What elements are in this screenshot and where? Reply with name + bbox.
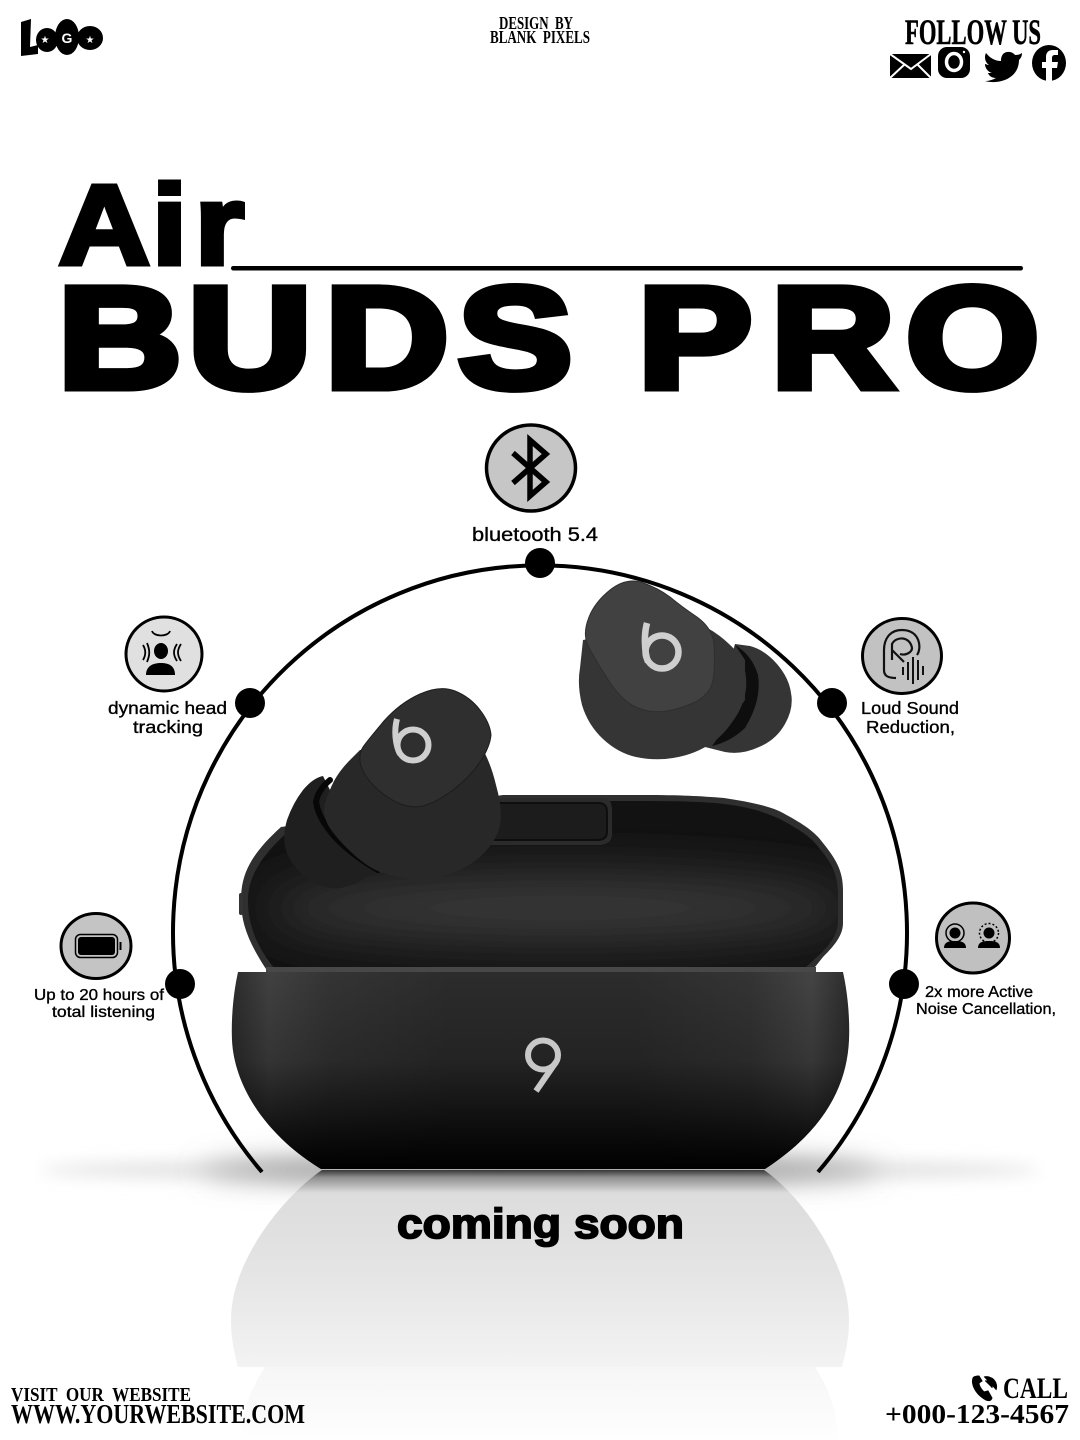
feature: loud sound reduction xyxy=(817,618,959,737)
icon: instagram xyxy=(938,47,970,78)
logo: G xyxy=(62,30,73,46)
connector dot xyxy=(889,969,919,999)
icon: logo mark on case xyxy=(528,1040,558,1091)
earbud body xyxy=(324,745,501,879)
logo: ★ xyxy=(86,35,95,46)
connector dot xyxy=(525,548,555,578)
sound reduction label: Loud Sound xyxy=(861,698,959,718)
feature: battery: total listening xyxy=(52,1004,155,1021)
design credit: BLANK PIXELS xyxy=(490,27,590,47)
icon: twitter xyxy=(985,52,1022,82)
icon: facebook xyxy=(1032,45,1066,81)
ear tip gap xyxy=(316,780,378,870)
earbud cap xyxy=(585,581,714,712)
bluetooth label: bluetooth 5.4 xyxy=(472,525,598,546)
feature: battery xyxy=(34,914,195,1021)
icon: b logo left xyxy=(395,719,428,760)
battery label: Up to 20 hours of xyxy=(34,987,165,1004)
feature: bluetooth xyxy=(472,425,598,578)
title: Air with underline: Air xyxy=(59,162,244,288)
icon: battery xyxy=(61,914,131,978)
icon: head tracking xyxy=(126,617,202,691)
icon: mail xyxy=(890,54,931,78)
feature: active noise cancellation: Noise Cancellation, xyxy=(916,1001,1056,1018)
logo: ★ xyxy=(41,35,50,46)
design credit: DESIGN BY xyxy=(499,13,573,33)
coming soon text: coming soon xyxy=(397,1200,684,1247)
title: Air with underline xyxy=(59,162,1023,288)
connector dot xyxy=(165,969,195,999)
charging case lid xyxy=(239,795,860,972)
icon: ear xyxy=(862,618,942,694)
ear tip xyxy=(705,644,792,753)
right earbud xyxy=(579,581,792,759)
earbud cap xyxy=(360,689,491,807)
website block xyxy=(11,1384,305,1429)
follow us social block xyxy=(890,12,1066,82)
left earbud xyxy=(284,689,501,888)
ear tip xyxy=(284,776,377,888)
case reflection xyxy=(231,1170,849,1376)
icon: b logo right xyxy=(645,623,678,668)
shadow band under case xyxy=(40,1158,1040,1182)
title: BUDS PRO: BUDS PRO xyxy=(58,257,1039,418)
noise cancellation label: 2x more Active xyxy=(925,984,1033,1001)
head tracking label: dynamic head xyxy=(108,698,227,718)
charging case base xyxy=(232,967,849,1169)
feature: dynamic head tracking: tracking xyxy=(133,717,203,737)
feature: loud sound reduction: Reduction, xyxy=(866,717,955,737)
icon: noise cancellation xyxy=(936,903,1010,973)
icon: phone xyxy=(973,1376,997,1401)
connector dot xyxy=(817,688,847,718)
connector dot xyxy=(235,688,265,718)
feature: dynamic head tracking xyxy=(108,617,265,737)
website block: WWW.YOURWEBSITE.COM xyxy=(11,1399,305,1429)
phone number: +000-123-4567 xyxy=(885,1399,1069,1429)
icon: bluetooth xyxy=(486,425,576,511)
feature: active noise cancellation xyxy=(889,903,1056,1018)
website block: VISIT OUR WEBSITE xyxy=(11,1384,191,1406)
ear tip gap xyxy=(712,645,759,746)
call block xyxy=(885,1372,1069,1429)
logo xyxy=(21,19,103,56)
design credit xyxy=(490,13,590,47)
earbud body xyxy=(579,620,746,759)
decorative arc xyxy=(173,565,907,1172)
